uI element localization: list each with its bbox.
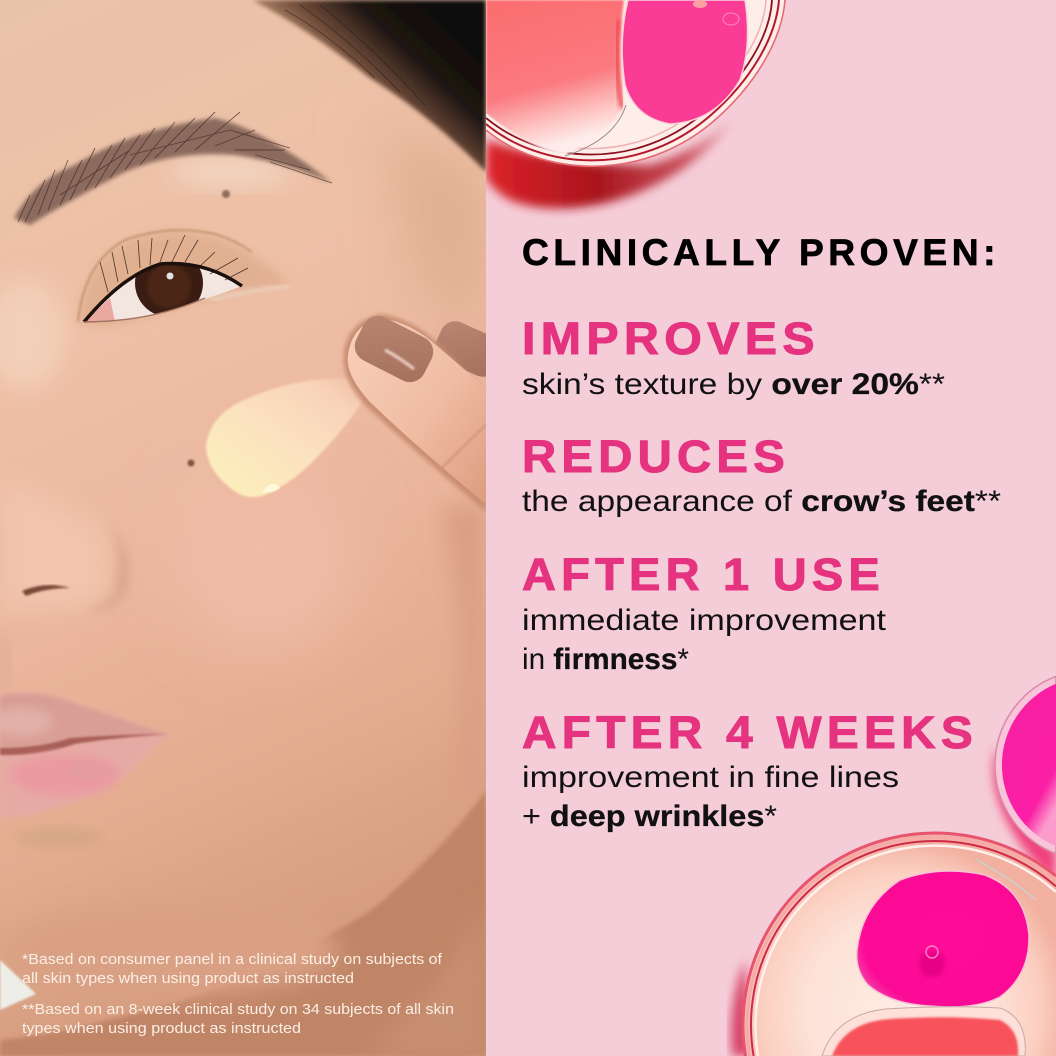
- coral liquid: [822, 1007, 1025, 1056]
- eyebrow: [14, 112, 332, 225]
- left jaw shade: [189, 934, 342, 1002]
- benefit: improves: IMPROVES: [522, 313, 820, 364]
- cheek glow: [205, 518, 342, 644]
- pink liquid: [622, 0, 748, 124]
- benefit: after 4 weeks: AFTER 4 WEEKS: [522, 707, 978, 758]
- benefit: improves: skin’s texture by over 20% **: [522, 368, 945, 401]
- lips: [0, 693, 168, 818]
- icon: cream swatch: [206, 378, 364, 497]
- benefit: reduces: [522, 431, 1001, 518]
- chin shadow: [22, 830, 96, 846]
- footnotes: types when using product as instructed: [22, 1021, 301, 1037]
- dish: [995, 676, 1056, 854]
- benefit: after 1 use: immediate improvement: [522, 604, 887, 637]
- benefit: reduces: the appearance of crow’s feet **: [522, 485, 1001, 518]
- dish shadow: [486, 118, 735, 209]
- benefit: after 4 weeks: improvement in fine lines: [522, 761, 899, 794]
- dish shadow: [731, 960, 752, 1056]
- benefit: reduces: REDUCES: [522, 431, 790, 482]
- dish glass: [743, 833, 1056, 1056]
- hair: [252, 0, 486, 172]
- photo: face applying cream: [0, 0, 508, 1056]
- benefit: after 1 use: in firmness*: [522, 643, 689, 676]
- mole: [222, 190, 230, 198]
- benefit: improves: [522, 313, 945, 401]
- small bubble: [723, 13, 739, 25]
- fingers: [342, 312, 486, 511]
- footnotes: all skin types when using product as instructed: [22, 971, 354, 987]
- benefit: after 4 weeks: + deep wrinkles *: [522, 800, 777, 833]
- eye: [78, 230, 290, 330]
- background panel: [486, 0, 1056, 1056]
- forehead sheen: [170, 158, 290, 186]
- benefit: after 4 weeks: [522, 707, 978, 833]
- dish rings: [743, 833, 1056, 1056]
- heading: clinically proven: CLINICALLY PROVEN:: [522, 232, 1000, 273]
- footnotes: **Based on an 8-week clinical study on 34 subjects of all skin: [22, 1002, 454, 1018]
- dish rings: [486, 0, 785, 166]
- petri dish: top: [486, 0, 785, 209]
- right cheek edge shading: [442, 501, 486, 712]
- petri dish: bottom: [731, 833, 1056, 1056]
- silver highlight: [977, 860, 1036, 900]
- footnotes: *Based on consumer panel in a clinical study on subjects of: [22, 952, 443, 968]
- dish shadow: [993, 745, 1056, 885]
- benefit: after 1 use: [522, 549, 887, 676]
- nose: [5, 499, 130, 606]
- temple shading: [383, 135, 486, 310]
- footnotes: [22, 952, 454, 1037]
- white collar corner: [0, 960, 36, 1010]
- pink liquid: [857, 871, 1029, 1007]
- coral liquid: [486, 0, 624, 155]
- benefit: after 1 use: AFTER 1 USE: [522, 549, 885, 600]
- mole: [188, 460, 194, 466]
- dish glass: [486, 0, 785, 166]
- neck below jaw: [0, 790, 486, 1056]
- bubbles: [919, 951, 945, 977]
- petri dish: right: [993, 676, 1056, 885]
